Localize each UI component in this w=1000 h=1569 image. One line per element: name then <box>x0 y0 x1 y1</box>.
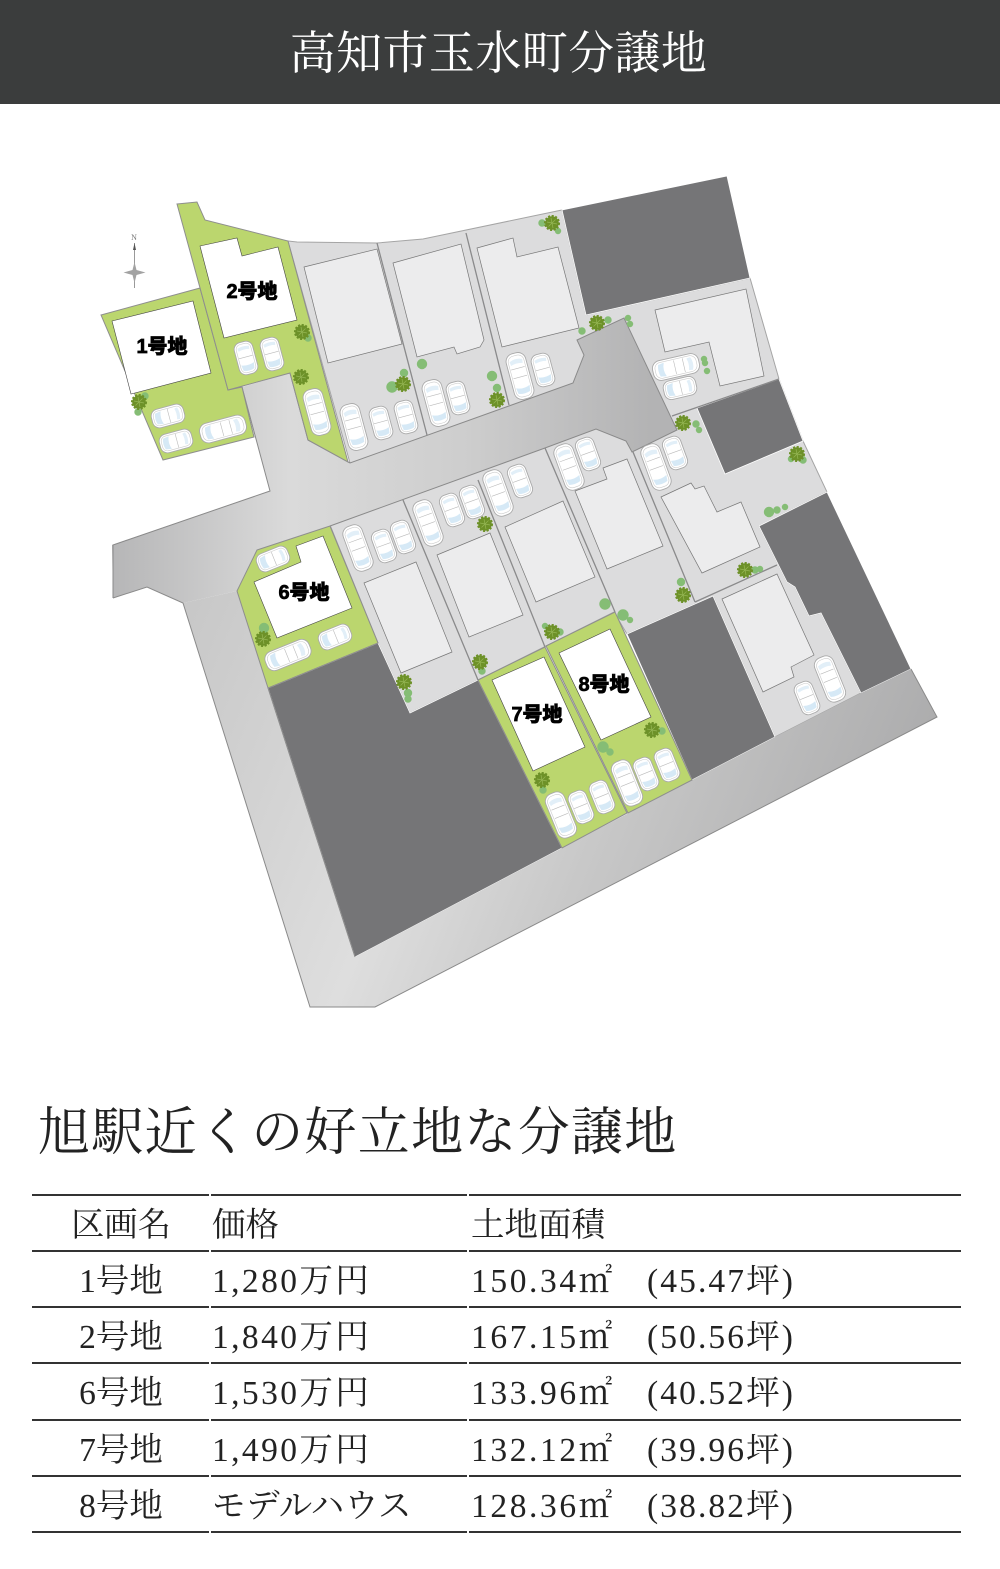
row: lot 8: 8号地 <box>79 1488 163 1525</box>
light grey residential lots <box>288 210 861 737</box>
row: lot 2: 2号地 <box>79 1319 163 1356</box>
green lot 8 <box>546 612 692 813</box>
row: lot 8 <box>79 1488 795 1525</box>
price table <box>32 1194 961 1533</box>
row: lot 6: 6号地 <box>79 1375 163 1412</box>
green lot 1 <box>101 288 254 460</box>
row: lot 1: 150.34㎡ <box>471 1263 615 1300</box>
lot dividers <box>377 233 779 680</box>
row: lot 7 <box>79 1432 795 1469</box>
row: lot 6 <box>79 1375 795 1412</box>
row: lot 6: 133.96㎡ <box>471 1375 615 1412</box>
row: lot 2: 167.15㎡ <box>471 1319 615 1356</box>
lot labels: 6号地 <box>278 581 330 604</box>
road lower section <box>183 591 937 1007</box>
row: lot 1: 1号地 <box>79 1263 163 1300</box>
parked cars <box>150 336 848 841</box>
compass: N <box>131 233 137 242</box>
row: lot 8: 128.36㎡ <box>471 1488 615 1525</box>
header row: 土地面積 <box>471 1207 605 1244</box>
row: lot 7: 7号地 <box>79 1432 163 1469</box>
row: lot 2 <box>79 1319 795 1356</box>
dark neighbouring lots <box>268 176 911 957</box>
lot labels: 7号地 <box>511 703 563 726</box>
green lot 2 <box>177 202 348 462</box>
row: lot 8: モデルハウス <box>212 1488 412 1525</box>
site plan map <box>100 176 938 1008</box>
row: lot 8: (38.82坪) <box>647 1488 795 1525</box>
green lot 7 <box>478 647 627 848</box>
row: lot 1 <box>79 1263 795 1300</box>
lot labels: 8号地 <box>578 673 630 696</box>
lot labels: 2号地 <box>226 280 278 303</box>
green lot 6 <box>237 526 378 688</box>
row: lot 2: 1,840万円 <box>212 1319 371 1356</box>
lot labels: 1号地 <box>136 335 188 358</box>
header row: 価格 <box>212 1207 279 1244</box>
lot labels <box>136 280 630 726</box>
row: lot 7: (39.96坪) <box>647 1432 795 1469</box>
row: lot 6: (40.52坪) <box>647 1375 795 1412</box>
row: lot 7: 132.12㎡ <box>471 1432 615 1469</box>
header row: 区画名 <box>71 1207 171 1244</box>
road edge lines <box>113 318 937 1007</box>
banner background <box>0 0 1000 104</box>
section heading: 旭駅近くの好立地な分譲地 <box>38 1105 678 1162</box>
white houses for sale <box>112 238 651 771</box>
grey neighbouring houses <box>304 238 814 692</box>
row: lot 6: 1,530万円 <box>212 1375 371 1412</box>
row: lot 1: 1,280万円 <box>212 1263 371 1300</box>
dark green trees <box>132 216 804 787</box>
light green shrubs <box>135 220 806 793</box>
row: lot 2: (50.56坪) <box>647 1319 795 1356</box>
header row <box>71 1207 605 1244</box>
title banner: 高知市玉水町分譲地 <box>290 28 707 79</box>
road upper section <box>112 318 677 603</box>
row: lot 1: (45.47坪) <box>647 1263 795 1300</box>
compass <box>124 233 146 288</box>
row: lot 7: 1,490万円 <box>212 1432 371 1469</box>
